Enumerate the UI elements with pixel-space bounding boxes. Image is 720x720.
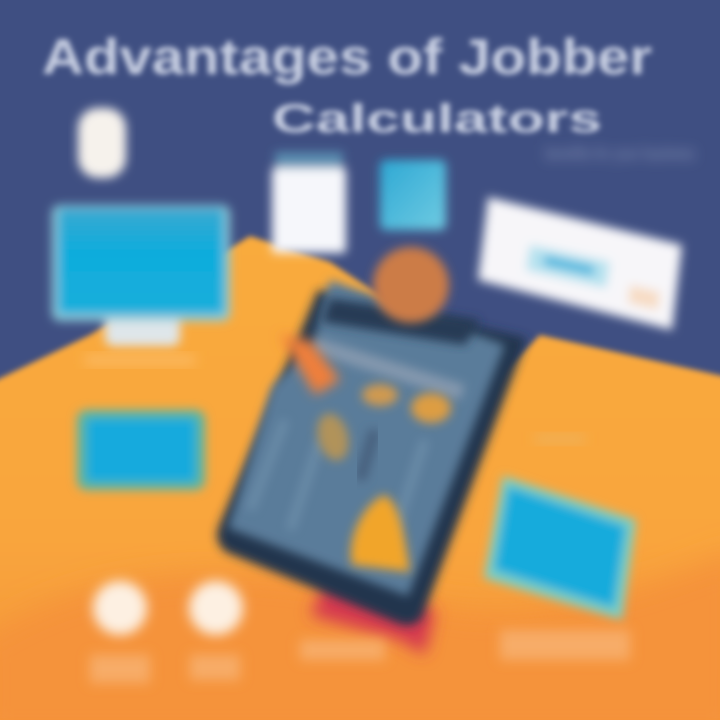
icon: circle 2 [189,581,243,635]
phone shadow edge [310,575,435,655]
monitor caption [85,355,195,365]
right caption [535,435,585,443]
phone dark header [322,298,480,345]
icon: lock [351,495,410,572]
phone body [217,290,527,625]
card: blue square [380,160,446,230]
icon: monitor [52,205,230,346]
phone screen [228,280,505,596]
phone dark gap [360,430,375,480]
phone key lines [250,420,425,560]
icon: orange coin [373,247,449,323]
phone orange dots [312,384,451,464]
phone calculator [217,280,527,655]
card: white document [272,152,346,253]
phone orange bleed [280,335,340,395]
background: lower orange wave [0,550,720,720]
card: tilted white panel [478,197,682,330]
title [42,29,652,141]
card: blue left [77,410,205,490]
title: Advantages of Jobber [42,29,652,85]
phone light strip [312,338,465,400]
bottom captions [90,630,630,683]
background: orange ground [0,236,720,720]
title: Calculators [272,97,602,141]
icon: circle 1 [93,581,147,635]
icon: document [78,108,126,178]
card: blue right [484,476,636,620]
